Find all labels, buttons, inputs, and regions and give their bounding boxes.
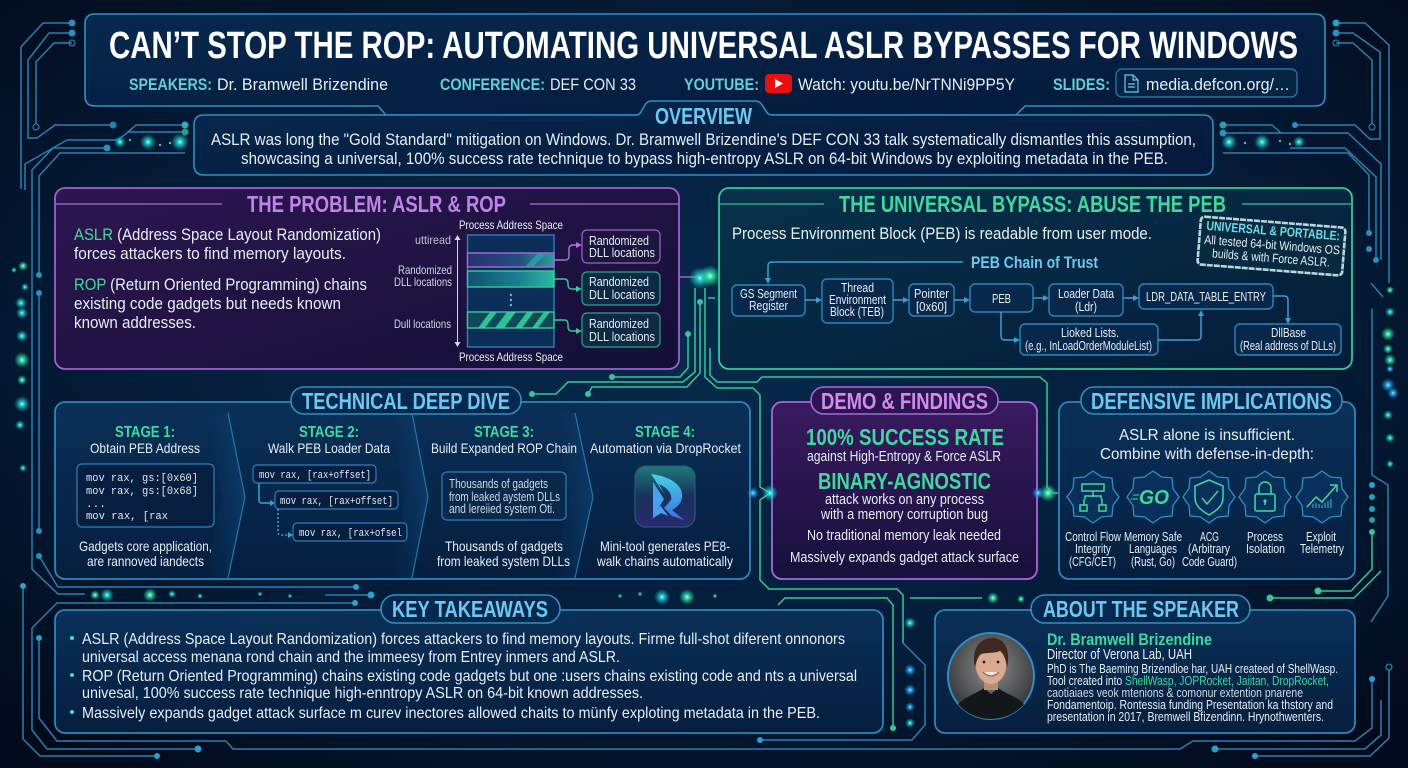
memory diagram: DLL locations	[589, 330, 655, 344]
stage 4	[590, 424, 741, 569]
memory diagram: Process Address Space	[459, 218, 563, 232]
icon: memory safe languages	[1127, 471, 1179, 523]
stage 2	[253, 424, 407, 541]
conference	[440, 75, 636, 94]
defense labels: ACG	[1200, 530, 1219, 544]
defensive intro: ASLR alone is insufficient.	[1119, 427, 1295, 444]
memory diagram: Randomized	[398, 263, 452, 277]
problem heading: THE PROBLEM: ASLR & ROP	[247, 191, 506, 217]
icon: process isolation	[1239, 471, 1291, 523]
defense labels: Code Guard)	[1182, 555, 1237, 569]
problem text	[74, 226, 381, 332]
defense labels: Process	[1247, 530, 1283, 544]
defense labels: (CFG/CET)	[1069, 555, 1116, 569]
stage 3: Thousands of gadgets	[449, 477, 548, 491]
conference: CONFERENCE:	[440, 75, 545, 94]
chain flow diagram: Register	[749, 298, 789, 313]
stage 3	[431, 424, 577, 569]
speakers: SPEAKERS:	[129, 75, 212, 94]
stage 1: ...	[86, 499, 106, 511]
memory diagram: DLL locations	[589, 288, 655, 302]
memory diagram: Randomized	[589, 317, 649, 331]
speaker name: Dr. Bramwell Brizendine	[1047, 630, 1212, 649]
glow nodes	[11, 133, 1399, 728]
icon: control flow integrity	[1067, 471, 1119, 523]
memory diagram: Randomized	[589, 275, 649, 289]
memory diagram	[394, 218, 660, 364]
icon: arbitrary code guard	[1183, 471, 1235, 523]
panel: header	[85, 14, 1325, 115]
stage 2: mov rax, [rax+ofsel	[299, 528, 402, 540]
defense labels: Integrity	[1075, 542, 1112, 556]
stage 4: walk chains automatically	[596, 553, 733, 569]
speaker bio: Tool created into ShellWasp, JOPRocket, Jaiitan, DropRocket,	[1047, 674, 1329, 688]
takeaways list	[70, 631, 857, 722]
stage 1: mov rax, [rax	[86, 511, 168, 523]
chain flow diagram: [0x60]	[916, 299, 947, 314]
stat: success rate	[806, 424, 1004, 465]
youtube link: YOUTUBE:	[684, 75, 759, 94]
chain flow diagram: Environment	[829, 292, 886, 307]
stamp: universal and portable: All tested 64-bit Windows OS	[1204, 233, 1340, 257]
panel: about the speaker	[935, 595, 1355, 733]
findings: Massively expands gadget attack surface	[790, 550, 1019, 566]
defense labels	[1065, 530, 1345, 569]
stage 2: STAGE 2:	[299, 424, 359, 441]
stage 3: Thousands of gadgets	[445, 538, 563, 554]
memory diagram: Dull locations	[394, 317, 451, 331]
panel: key takeaways	[55, 595, 883, 733]
findings	[790, 528, 1019, 566]
stage 3: and lereiied system Oti.	[449, 502, 555, 516]
defense labels: (Rust, Go)	[1131, 555, 1175, 569]
problem text: ASLR (Address Space Layout Randomization)	[74, 226, 381, 244]
chain flow diagram: Pointer	[914, 286, 950, 301]
speaker role: Director of Verona Lab, UAH	[1047, 647, 1192, 663]
chain flow diagram: (e.g., InLoadOrderModuleList)	[1025, 339, 1152, 353]
takeaways list: Massively expands gadget attack surface m curev inectores allowed chaits to münfy exploting metadata in the PEB.	[82, 705, 820, 722]
stage 4: STAGE 4:	[635, 424, 695, 441]
chain flow diagram: PEB	[992, 291, 1011, 306]
defense labels: Memory Safe	[1124, 530, 1182, 544]
stat: success rate: 100% SUCCESS RATE	[806, 424, 1004, 450]
stage 3: from leaked system DLLs	[437, 553, 570, 569]
takeaways list: univesal, 100% success rate technique high-enntropy ASLR on 64-bit known addresses.	[82, 685, 643, 702]
problem text: known addresses.	[74, 314, 196, 332]
defensive intro	[1100, 427, 1314, 463]
overview text: showcasing a universal, 100% success rate technique to bypass high-entropy ASLR on 64-bit Windows by exploiting metadata in the PEB.	[241, 150, 1168, 168]
defense labels: (Arbitrary	[1188, 542, 1231, 556]
stage 1: mov rax, gs:[0x60]	[86, 473, 198, 485]
bypass heading: THE UNIVERSAL BYPASS: ABUSE THE PEB	[839, 191, 1226, 217]
takeaways list: ROP (Return Oriented Programming) chains existing code gadgets but one :users chains existing code and nts a universal	[82, 668, 857, 685]
youtube link	[684, 74, 1015, 94]
stage 3: Build Expanded ROP Chain	[431, 440, 577, 456]
problem text: forces attackers to find memory layouts.	[74, 245, 346, 263]
stage 4: Automation via DropRocket	[590, 440, 741, 456]
stage 1: are rannoved iandects	[87, 553, 204, 569]
panel: overview	[194, 101, 1213, 175]
youtube link: Watch: youtu.be/NrTNNi9PP5Y	[798, 75, 1015, 94]
chain flow diagram: Thread	[841, 280, 874, 295]
stat: binary agnostic: attack works on any process	[825, 492, 984, 508]
chain flow diagram	[732, 262, 1341, 355]
chain flow diagram: GS Segment	[740, 286, 797, 301]
stage 2: mov rax, [rax+offset]	[280, 496, 393, 508]
stat: success rate: against High-Entropy & Force ASLR	[807, 449, 1001, 465]
chain flow diagram: (Ldr)	[1075, 299, 1097, 314]
stage 3: STAGE 3:	[474, 424, 534, 441]
defensive tab: DEFENSIVE IMPLICATIONS	[1091, 388, 1332, 414]
stamp: universal and portable: UNIVERSAL & PORTABLE:	[1206, 218, 1341, 243]
speakers: Dr. Bramwell Brizendine	[217, 75, 388, 94]
memory diagram: DLL locations	[589, 246, 655, 260]
overview text	[211, 131, 1196, 168]
circuit traces: centre green bus	[529, 277, 1059, 743]
icon: memory safe languages: GO	[1139, 487, 1169, 509]
stage 1: Obtain PEB Address	[90, 440, 200, 456]
conference: DEF CON 33	[550, 75, 636, 94]
speaker bio: presentation in 2017, Bremwell Bfizendinn. Hrynothwenters.	[1047, 710, 1324, 724]
chain flow diagram: DllBase	[1271, 325, 1306, 340]
stamp: universal and portable: builds & with Force ASLR.	[1212, 246, 1330, 270]
takeaways tab: KEY TAKEAWAYS	[392, 596, 548, 622]
problem text: existing code gadgets but needs known	[74, 295, 341, 313]
stage 1: Gadgets core application,	[79, 538, 212, 554]
defense labels: Telemetry	[1300, 542, 1345, 556]
overview heading: OVERVIEW	[655, 103, 752, 129]
defensive intro: Combine with defense-in-depth:	[1100, 446, 1314, 463]
demo tab: DEMO & FINDINGS	[821, 388, 988, 414]
memory diagram: Process Address Space	[459, 350, 563, 364]
defense labels: Control Flow	[1065, 530, 1122, 544]
slides link	[1053, 69, 1297, 97]
stat: binary agnostic: with a memory corruption bug	[820, 507, 988, 523]
memory diagram: DLL locations	[394, 275, 452, 289]
panel: demo and findings	[772, 387, 1037, 579]
memory diagram: Randomized	[589, 234, 649, 248]
speaker photo	[948, 633, 1034, 719]
panel: the problem	[55, 188, 679, 369]
icon: exploit telemetry	[1296, 471, 1348, 523]
problem text: ROP (Return Oriented Programming) chains	[74, 276, 367, 294]
chain flow diagram: Block (TEB)	[830, 304, 884, 319]
stage 1: STAGE 1:	[115, 424, 175, 441]
chain of trust heading: PEB Chain of Trust	[971, 254, 1098, 272]
stage 2: Walk PEB Loader Data	[268, 440, 390, 456]
stage dividers	[205, 413, 593, 578]
slides link: SLIDES:	[1053, 75, 1110, 94]
chain flow diagram: Loader Data	[1058, 286, 1115, 301]
stage 3: from leaked aystem DLLs	[449, 490, 560, 504]
icon: droprocket logo	[635, 466, 695, 527]
stage 2: mov rax, [rax+offset]	[259, 470, 371, 482]
stat: binary agnostic: BINARY-AGNOSTIC	[818, 468, 991, 494]
overview text: ASLR was long the "Gold Standard" mitigation on Windows. Dr. Bramwell Brizendine's DEF CON 33 talk systematically dismantles this assumption,	[211, 131, 1196, 149]
stamp: universal and portable	[1197, 216, 1346, 276]
stat: binary agnostic	[818, 468, 991, 523]
panel: the universal bypass	[719, 188, 1352, 369]
speaker bio: PhD is The Baeming Brizendioe har, UAH createed of ShellWasp.	[1047, 662, 1338, 676]
panel: defensive implications	[1059, 387, 1355, 579]
defense labels: Exploit	[1306, 530, 1336, 544]
chain flow diagram: LDR_DATA_TABLE_ENTRY	[1146, 289, 1266, 304]
circuit traces: right	[1220, 20, 1389, 622]
slides link: media.defcon.org/…	[1146, 75, 1290, 94]
speaker bio	[1047, 662, 1338, 724]
stage 1	[77, 424, 214, 569]
bypass intro: Process Environment Block (PEB) is readable from user mode.	[732, 225, 1152, 243]
defense labels: Languages	[1129, 542, 1177, 556]
takeaways list: universal access menana rond chain and the immeesy from Entrey inmers and ASLR.	[82, 649, 620, 666]
speaker bio: caotiaiaes veok mtenions & comonur extention pnarene	[1047, 686, 1303, 700]
defense labels: Isolation	[1246, 542, 1285, 556]
speaker bio: Fondamentoip. Rontessia funding Presentation ka thstory and	[1047, 698, 1333, 712]
memory diagram: uttiread	[415, 233, 451, 247]
chain flow diagram: Lioked Lists.	[1061, 325, 1119, 340]
speakers	[129, 75, 388, 94]
chain flow diagram: (Real address of DLLs)	[1240, 339, 1336, 353]
stage 4: Mini-tool generates PE8-	[600, 538, 730, 554]
stage 1: mov rax, gs:[0x68]	[86, 486, 198, 498]
takeaways list: ASLR (Address Space Layout Randomization) forces attackers to find memory layouts. Firme full-shot diferent onnonors	[82, 631, 845, 648]
panel: technical deep dive	[55, 387, 750, 579]
findings: No traditional memory leak needed	[807, 528, 1001, 544]
speaker tab: ABOUT THE SPEAKER	[1043, 596, 1239, 622]
deep dive tab: TECHNICAL DEEP DIVE	[302, 388, 510, 414]
